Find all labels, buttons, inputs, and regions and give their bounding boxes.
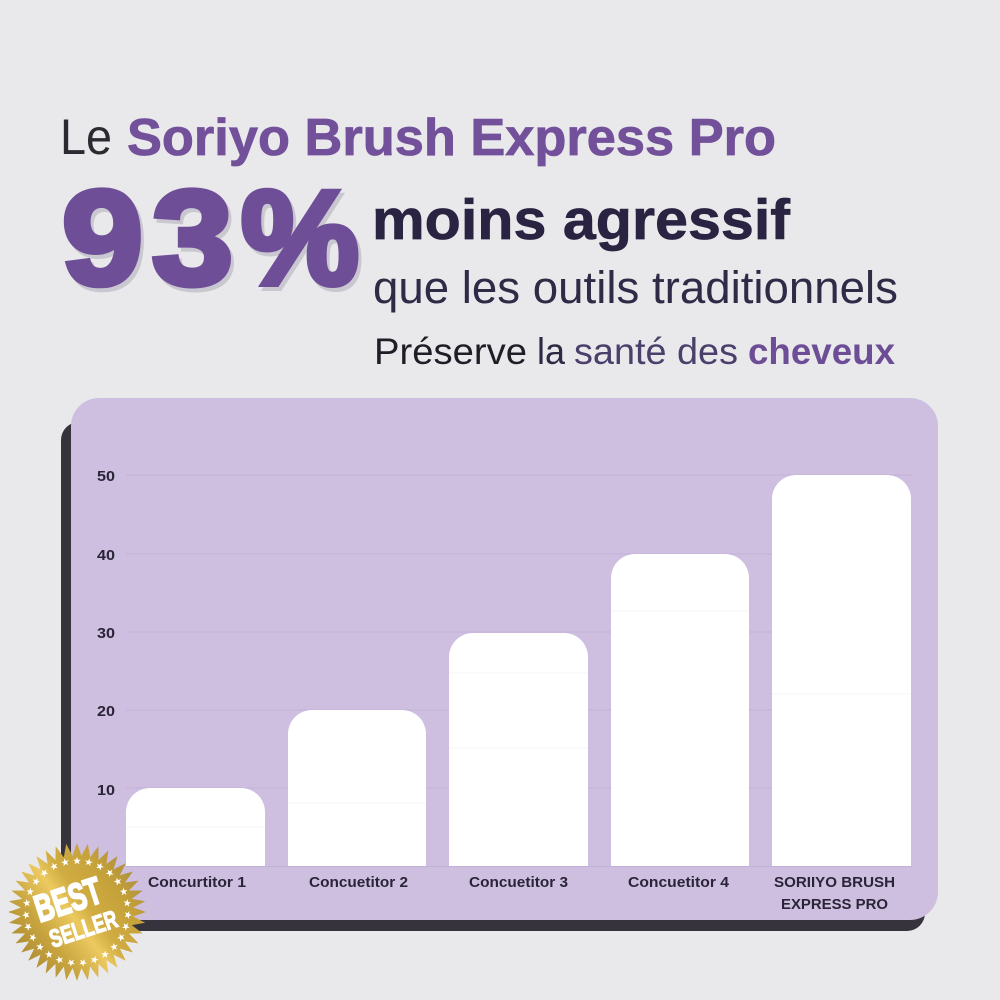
big statistic: 93%: 9 bbox=[65, 168, 146, 317]
bar: Concuetitor 4 bbox=[611, 554, 749, 866]
y axis labels: 10 bbox=[97, 782, 115, 799]
title line: Le Soriyo Brush Express Pro: Le bbox=[60, 109, 112, 165]
x axis labels: Concuetitor 3 bbox=[469, 875, 568, 891]
icon: best seller gold seal bbox=[8, 843, 146, 981]
big statistic: 93%: 3 bbox=[152, 164, 233, 313]
tagline: Préserve la santé des cheveux: cheveux bbox=[748, 331, 895, 372]
x axis labels bbox=[148, 875, 895, 913]
subheading: que les outils traditionnels: que les outils traditionnels bbox=[373, 262, 898, 313]
y axis labels bbox=[97, 468, 115, 799]
bar chart bbox=[97, 468, 912, 913]
tagline: Préserve la santé des cheveux bbox=[374, 331, 895, 372]
tagline: Préserve la santé des cheveux: Préserve bbox=[374, 331, 527, 372]
panel: chart card bbox=[61, 398, 938, 931]
bar: Concuetitor 2 bbox=[288, 710, 426, 866]
tagline: Préserve la santé des cheveux: santé des bbox=[574, 331, 738, 372]
badge text: BEST bbox=[29, 870, 107, 931]
y axis labels: 40 bbox=[97, 547, 115, 564]
big statistic: 93% bbox=[62, 164, 362, 317]
title line: Le Soriyo Brush Express Pro: Soriyo Brush Express Pro bbox=[127, 109, 776, 167]
bar: Concuetitor 3 bbox=[449, 633, 588, 866]
big statistic: 93%: 3 bbox=[155, 168, 236, 317]
x axis labels: EXPRESS PRO bbox=[781, 897, 888, 913]
tagline: Préserve la santé des cheveux: la bbox=[537, 331, 565, 372]
big statistic: 93%: % bbox=[241, 164, 359, 313]
bar: Soriiyo Brush Express Pro bbox=[772, 475, 911, 866]
badge text bbox=[29, 870, 121, 954]
x axis labels: SORIIYO BRUSH bbox=[774, 875, 895, 891]
bar: Concurtitor 1 bbox=[126, 788, 265, 866]
panel shadow bbox=[61, 422, 925, 931]
x axis labels: Concuetitor 4 bbox=[628, 875, 729, 891]
panel background bbox=[71, 398, 938, 920]
y axis labels: 50 bbox=[97, 468, 115, 485]
x axis labels: Concurtitor 1 bbox=[148, 875, 246, 891]
badge text: SELLER bbox=[46, 905, 121, 954]
big statistic: 93%: 9 bbox=[62, 164, 143, 313]
big statistic: 93%: % bbox=[244, 168, 362, 317]
y axis labels: 30 bbox=[97, 625, 115, 642]
y axis labels: 20 bbox=[97, 703, 115, 720]
x axis labels: Concuetitor 2 bbox=[309, 875, 408, 891]
headline: moins agressif: moins agressif bbox=[372, 188, 791, 252]
